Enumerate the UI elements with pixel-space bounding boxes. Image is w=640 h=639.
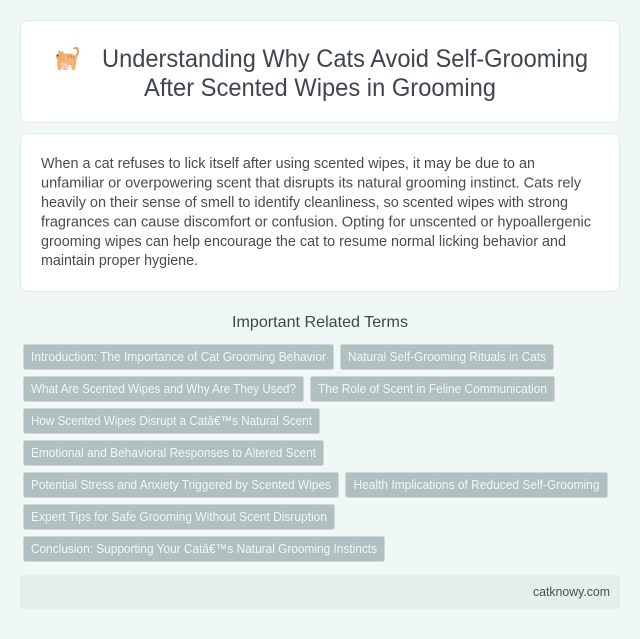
tag [24,376,304,402]
tag: Health Implications of Reduced Self-Grooming [354,478,600,492]
tag [346,472,608,498]
title: After Scented Wipes in Grooming [144,74,496,102]
tag [24,472,338,498]
tag: Expert Tips for Safe Grooming Without Scent Disruption [31,510,327,524]
description text: maintain proper hygiene. [41,252,198,269]
tag [310,376,554,402]
tag [24,344,334,370]
tag [24,504,334,530]
tag: Introduction: The Importance of Cat Grooming Behavior [31,350,326,364]
description text [41,155,591,269]
description text: When a cat refuses to lick itself after using scented wipes, it may be due to an [41,155,535,172]
panel: description [20,134,620,292]
tag [24,440,324,466]
tag: What Are Scented Wipes and Why Are They Used? [31,382,296,396]
header panel [20,20,620,122]
tag: How Scented Wipes Disrupt a Catâ€™s Natural Scent [31,414,312,428]
tag: Conclusion: Supporting Your Catâ€™s Natural Grooming Instincts [31,542,377,556]
description text: fragrances can cause discomfort or confusion. Opting for unscented or hypoallergenic [41,214,591,230]
title: Understanding Why Cats Avoid Self-Grooming [102,45,588,73]
tag: Emotional and Behavioral Responses to Altered Scent [31,446,316,460]
tag: The Role of Scent in Feline Communication [318,382,547,396]
title [102,45,588,102]
tag: Natural Self-Grooming Rituals in Cats [348,350,546,364]
icon: cat [56,47,79,70]
tag list [24,344,608,562]
description text: heavily on their sense of smell to identify cleanliness, so scented wipes with strong [41,194,568,211]
tag: Potential Stress and Anxiety Triggered by Scented Wipes [31,478,331,492]
description text: unfamiliar or overpowering scent that disrupts its natural grooming instinct. Cats rely [41,174,581,192]
tag [340,344,554,370]
tag [24,408,320,434]
description text: grooming wipes can help encourage the cat to resume normal licking behavior and [41,233,566,250]
footer source text: catknowy.com [533,585,610,599]
heading: related terms: Important Related Terms [232,314,408,331]
tag [24,536,384,562]
footer [20,575,620,609]
